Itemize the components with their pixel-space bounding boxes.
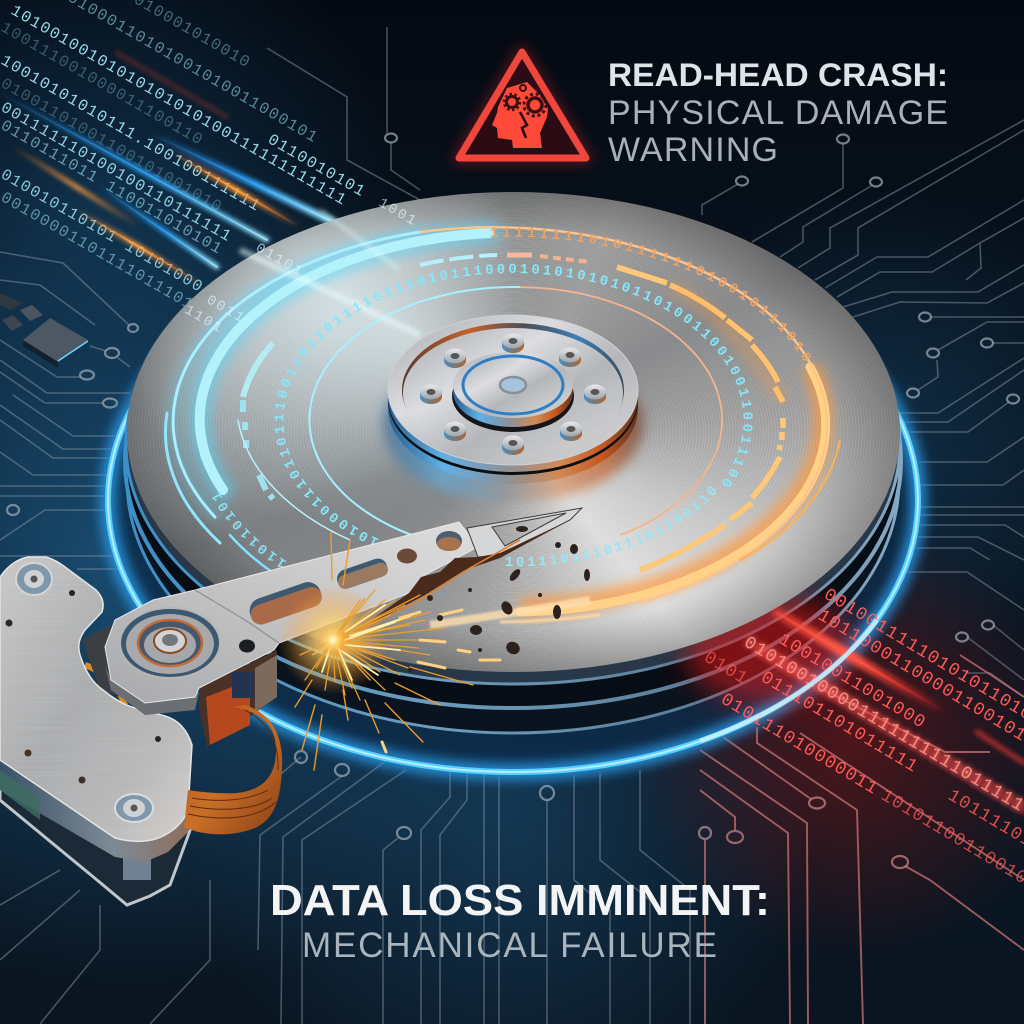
top plate side [0,760,188,862]
left binary stream: 0110010101 [264,131,369,201]
left binary stream: 100111001000011100110 [0,19,207,150]
plate screws [6,563,161,822]
left binary stream [0,0,369,314]
burnt crack [350,520,570,635]
spindle hub [383,315,643,502]
arm slots [246,579,325,627]
platter binary tracks: 10111011101110110011011011 [506,486,716,566]
platter binary tracks [212,227,811,568]
lower platters [125,204,901,733]
platter glowing orange arcs [420,227,840,625]
support post [123,840,151,880]
left binary stream: 001111110100100110111111 [0,99,235,246]
red binary stream: 10110001100001100101 [814,606,1024,747]
triangle [459,52,586,158]
red binary stream: 010100100001111111111011111 [740,633,1024,817]
caption line 1: DATA LOSS IMMINENT: [270,876,770,925]
copper back bend [85,665,125,705]
heading: read-head crash [608,57,948,169]
sparks [278,532,500,770]
crack [520,112,527,138]
left binary continuing over platter: 01101 [252,240,306,281]
left binary stream: 0110111011 110011010101 [0,117,226,259]
head suspension [467,508,582,557]
gears [504,85,546,116]
platter glare cross streak [240,210,420,335]
electronic chip components, left [0,293,88,368]
circuit traces: red section [700,655,1024,1024]
top base plate [0,556,193,842]
left binary stream: 10100100101010101010100111111111111 [8,2,350,210]
caption line 2: MECHANICAL FAILURE [302,926,717,965]
main platter surface [127,192,900,672]
left binary continuing over platter: 1101 [182,302,226,338]
left binary stream: 01001101001100101001010 [0,75,226,217]
pivot bearing [120,608,220,678]
left binary continuing over platter: 1001 [376,195,420,231]
blue glowing ring [108,228,918,772]
hub body [388,315,638,484]
left binary stream: 10010101010111.100100111111 [0,52,264,216]
actuator assembly [0,508,582,905]
heading line 1: READ-HEAD CRASH: [608,57,948,93]
hub centre disc [452,352,574,432]
left light streaks [0,53,333,283]
circuit strip on side [0,770,40,820]
red binary stream: 010111010000011 [717,690,882,800]
left binary stream: 00100001101111011101 [0,189,197,314]
hub reflection [383,346,643,502]
triangle glow [459,52,586,158]
left binary stream: 010010110101 10101000 [0,166,207,297]
warning triangle icon [459,52,586,158]
pivot shadow [82,625,130,700]
lower base plate [0,770,192,905]
platter binary tracks: 1101000111011011100110110111101110101110001010101010110100110010011001110010010111010111011110101101 [274,264,753,544]
flex cable [184,705,282,834]
red binary stream: 0101 [700,648,751,690]
debris fragments [408,526,590,672]
circuit nodes [7,134,1019,868]
red light streaks [760,613,1024,808]
red binary stream [700,585,1024,890]
caption: data loss imminent [270,876,770,965]
red binary stream: 011101101011111 [757,668,922,778]
heading line 2: PHYSICAL DAMAGE [608,94,948,132]
left binary continuing over platter [182,195,420,338]
hub screws [420,334,606,455]
red binary stream: 10010011001000 [775,630,929,734]
cyan ring highlight over red stream [700,620,877,741]
actuator arm [105,522,478,747]
left binary continuing over platter: 0011 [204,292,248,328]
heading line 3: WARNING [608,131,778,169]
head silhouette [492,82,548,148]
platter glowing cyan arcs [165,232,520,572]
